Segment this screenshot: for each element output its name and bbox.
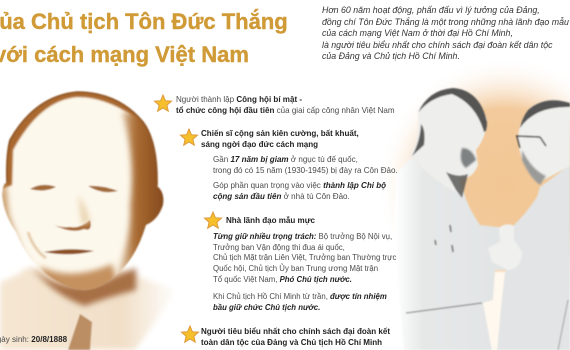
photograph of Hồ Chí Minh and Tôn Đức Thắng [395, 88, 570, 350]
portrait: chin shading [40, 264, 120, 297]
item 2 text A: trong đó có 15 năm (1930-1945) bị đày ra Côn Đảo. [213, 166, 398, 175]
item 2 text B [213, 181, 386, 201]
title line 2 (clipped): với cách mạng Việt Nam [0, 42, 249, 67]
item 2 text B: Góp phần quan trọng vào việc thành lập Chi bộ [213, 181, 386, 190]
portrait: collar [68, 314, 92, 350]
background and photographs [0, 72, 570, 350]
star 1 [154, 95, 172, 111]
intro paragraph: Hơn 60 năm hoạt động, phấn đấu vì lý tưởng của Đảng, [322, 5, 540, 15]
photo: second man hair [520, 100, 570, 128]
item 3 heading: Nhà lãnh đạo mẫu mực [226, 216, 315, 225]
photo: Hồ Chí Minh beard [446, 172, 468, 198]
intro paragraph: đồng chí Tôn Đức Thắng là một trong những nhà lãnh đạo mẫu [322, 17, 569, 27]
item 3 text B: bầu giữ chức Chủ tịch nước. [213, 303, 320, 312]
star 2 [180, 129, 198, 145]
photo: coat buttons [435, 225, 453, 252]
photo: Hồ Chí Minh head [410, 88, 487, 196]
peach backdrop [370, 50, 570, 350]
item 3 text B [213, 292, 387, 312]
item 1: founder: Người thành lập Công hội bí mật - [176, 95, 302, 104]
star 3 [204, 212, 222, 228]
photo: Hồ Chí Minh face shading [461, 148, 476, 168]
item 2 heading: sáng ngời đạo đức cách mạng [201, 140, 318, 149]
photo: second man coat [497, 165, 570, 350]
intro paragraph: của Đảng và Chủ tịch Hồ Chí Minh. [322, 51, 460, 61]
photo: second man head [518, 100, 570, 183]
portrait: left face edge [1, 184, 32, 258]
item 4 heading: toàn dân tộc của Đảng và Chủ tịch Hồ Chí Minh [201, 338, 382, 347]
photo: right coat seam [558, 300, 568, 350]
item 2 heading: Chiến sĩ cộng sản kiên cường, bất khuất, [201, 129, 359, 138]
item 3 text A: Quốc hội, Chủ tịch Ủy ban Trung ương Mặt trận [213, 264, 378, 273]
portrait of Tôn Đức Thắng [0, 86, 177, 350]
photo: Hồ Chí Minh coat [395, 158, 521, 350]
portrait: hair outline [7, 92, 157, 186]
intro paragraph [322, 5, 569, 61]
portrait: mouth [44, 249, 94, 254]
portrait: nose [54, 220, 91, 231]
item 3 text A: Chủ tịch Mặt trận Liên Việt, Trưởng ban Thường trực [213, 253, 396, 262]
portrait: right eye and brow [88, 186, 118, 192]
title [0, 8, 288, 67]
portrait: shirt and shoulders [0, 268, 177, 350]
item 2 text A [213, 155, 398, 175]
portrait: head [0, 86, 170, 298]
intro paragraph: là người tiêu biểu nhất cho chính sách đại đoàn kết dân tộc [322, 40, 552, 50]
photo: Hồ Chí Minh hair [418, 88, 487, 132]
photo: clasped hands [488, 224, 522, 270]
portrait: left eye and brow [30, 185, 56, 191]
item 4 heading: Người tiêu biểu nhất cho chính sách đại đoàn kết [201, 327, 390, 336]
star 4 [182, 326, 198, 342]
stars [154, 95, 222, 342]
item 2 text A: Gần 17 năm bị giam ở ngục tù đế quốc, [213, 155, 358, 164]
portrait: left cheek fold [28, 232, 46, 258]
item 3 text A [213, 232, 396, 284]
portrait: pale face base [6, 96, 164, 290]
photo: belt line [406, 303, 482, 313]
item 1: founder [176, 95, 395, 115]
item 3 text A: Tổ quốc Việt Nam, Phó Chủ tịch nước. [213, 275, 352, 284]
portrait: nose ridge shade [78, 195, 90, 225]
portrait: neck shadow [32, 268, 136, 306]
item 3 text A: Từng giữ nhiều trọng trách: Bộ trưởng Bộ Nội vụ, [213, 232, 392, 241]
item 2 heading [201, 129, 359, 149]
item 4 heading [201, 327, 390, 347]
item 3 text B: Khi Chủ tịch Hồ Chí Minh từ trần, được tín nhiệm [213, 292, 387, 301]
photo: Hồ Chí Minh temple [412, 124, 425, 156]
item 3 text A: Trưởng ban Vận động thi đua ái quốc, [213, 243, 345, 252]
item 1: founder: tổ chức công hội đầu tiên của giai cấp công nhân Việt Nam [176, 106, 395, 115]
portrait: right side hair and shading [115, 110, 164, 274]
photo: white gap [483, 272, 505, 350]
photo: second man jaw shadow [522, 150, 546, 185]
portrait: top hair shading [2, 92, 137, 190]
photo: glasses [516, 136, 546, 148]
item 2 text B: cộng sản đầu tiên ở nhà tù Côn Đảo. [213, 192, 350, 201]
intro paragraph: của cách mạng Việt Nam ở thời đại Hồ Chí Minh, [322, 28, 513, 38]
